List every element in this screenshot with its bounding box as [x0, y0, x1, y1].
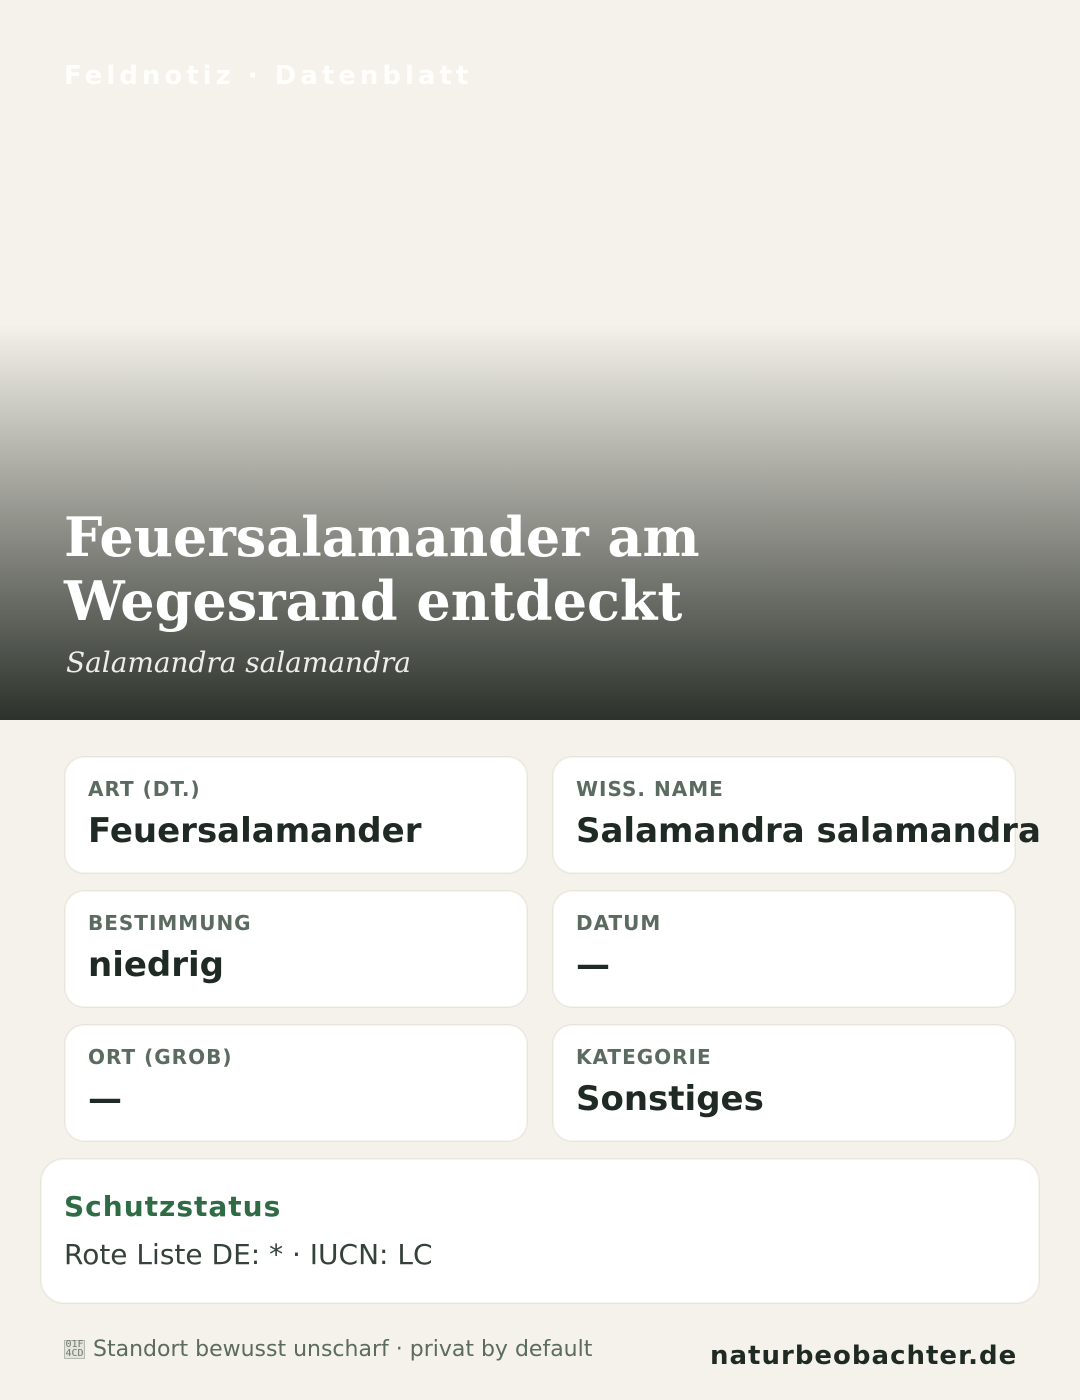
title — [64, 505, 700, 633]
label: ORT (GROB) — [88, 1045, 232, 1069]
heading: Schutzstatus — [64, 1190, 281, 1223]
label: KATEGORIE — [576, 1045, 712, 1069]
label: DATUM — [576, 911, 661, 935]
panel: Datum — [552, 890, 1016, 1008]
label: ART (DT.) — [88, 777, 201, 801]
label: WISS. NAME — [576, 777, 724, 801]
panel: Bestimmung — [64, 890, 528, 1008]
value: Sonstiges — [576, 1079, 764, 1119]
label: BESTIMMUNG — [88, 911, 252, 935]
panel: Ort — [64, 1024, 528, 1142]
value: Feuersalamander — [88, 811, 421, 851]
title: Feuersalamander am — [64, 505, 700, 569]
value: niedrig — [88, 945, 224, 985]
title: Wegesrand entdeckt — [64, 569, 682, 633]
icon: missing-glyph box: 4CD — [65, 1348, 84, 1358]
panel: wissenschaftlicher Name — [552, 756, 1016, 874]
brand: naturbeobachter.de — [710, 1341, 1017, 1371]
scientific name subtitle: Salamandra salamandra — [66, 646, 411, 679]
status text: Rote Liste DE: * · IUCN: LC — [64, 1238, 433, 1271]
icon: missing-glyph box — [64, 1340, 85, 1359]
panel: Kategorie — [552, 1024, 1016, 1142]
value: Salamandra salamandra — [576, 811, 1041, 851]
value: — — [576, 945, 610, 985]
panel: Schutzstatus — [40, 1158, 1040, 1304]
eyebrow: Feldnotiz · Datenblatt — [64, 61, 472, 91]
footer note: Standort bewusst unscharf · privat by default — [93, 1337, 592, 1362]
panel: Art — [64, 756, 528, 874]
icon: missing-glyph box: 01F — [65, 1339, 84, 1350]
hero panel — [0, 0, 1080, 720]
value: — — [88, 1079, 122, 1119]
